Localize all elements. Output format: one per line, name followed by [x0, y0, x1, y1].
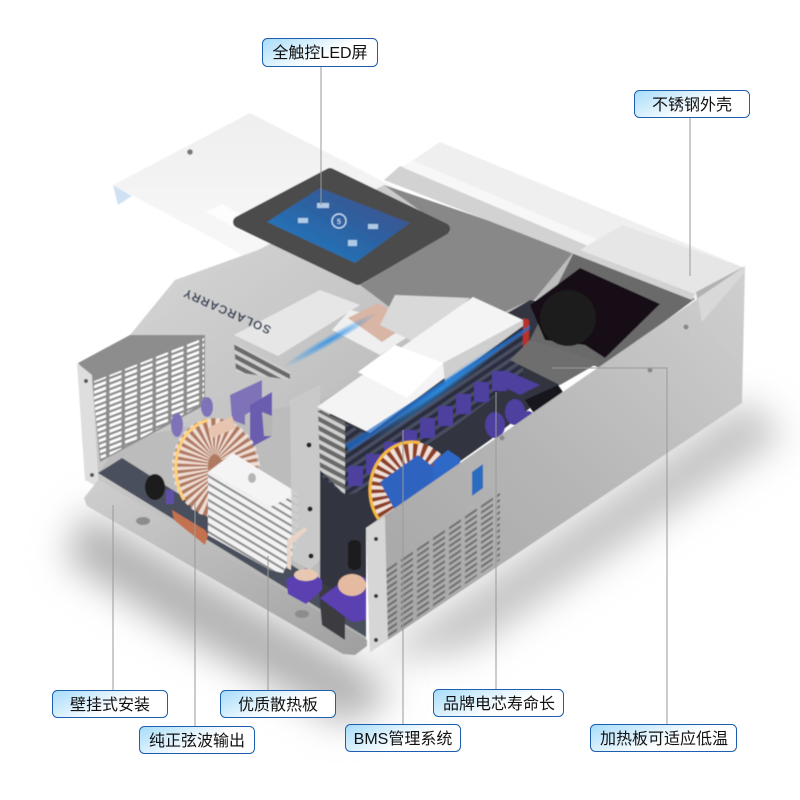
- stainless steel lid: [384, 142, 745, 322]
- label: heat sink: [220, 690, 336, 718]
- brand lettering: SOLARCARRY: [181, 286, 273, 337]
- main heat sink: [280, 297, 530, 495]
- floor strip: [98, 458, 366, 637]
- label: wall mount: 壁挂式安装: [70, 695, 150, 714]
- label: stainless steel shell: [634, 90, 750, 118]
- rear vented wall: [77, 335, 205, 487]
- screen display: 5: [337, 219, 341, 226]
- rear heat sink and coil: [234, 290, 470, 380]
- label: BMS: BMS管理系统: [354, 730, 452, 748]
- label: BMS: [346, 724, 460, 752]
- label: brand cells: [434, 690, 564, 716]
- label: brand cells: 品牌电芯寿命长: [443, 695, 555, 713]
- device artwork: [77, 113, 745, 655]
- fan: [510, 268, 660, 385]
- purple transistors row: [348, 370, 565, 486]
- label: heat sink: 优质散热板: [238, 696, 318, 714]
- screen display: [267, 188, 410, 263]
- capacitors and inductors: [286, 527, 366, 640]
- ghost top panel: [113, 113, 480, 290]
- right side panel: [366, 266, 745, 652]
- left copper toroid: [167, 413, 265, 545]
- right copper toroid and board: [370, 442, 470, 538]
- housing interior: [92, 185, 696, 640]
- ground shadow: [65, 400, 785, 725]
- label: sine wave output: 纯正弦波输出: [149, 732, 245, 750]
- translucent partition wall: [290, 385, 320, 570]
- label: heating plate: [590, 724, 736, 752]
- label: wall mount: [52, 690, 168, 718]
- label: touch LED screen: [262, 38, 378, 66]
- left components: [145, 380, 272, 504]
- label: heating plate: 加热板可适应低温: [600, 729, 728, 748]
- label: touch LED screen: 全触控LED屏: [272, 44, 368, 62]
- label: sine wave output: [140, 726, 254, 754]
- leader lines: [113, 67, 690, 726]
- left heat sink: [208, 453, 298, 573]
- touch screen: [239, 174, 444, 279]
- base flange: [84, 480, 367, 655]
- label: stainless steel shell: 不锈钢外壳: [652, 96, 732, 114]
